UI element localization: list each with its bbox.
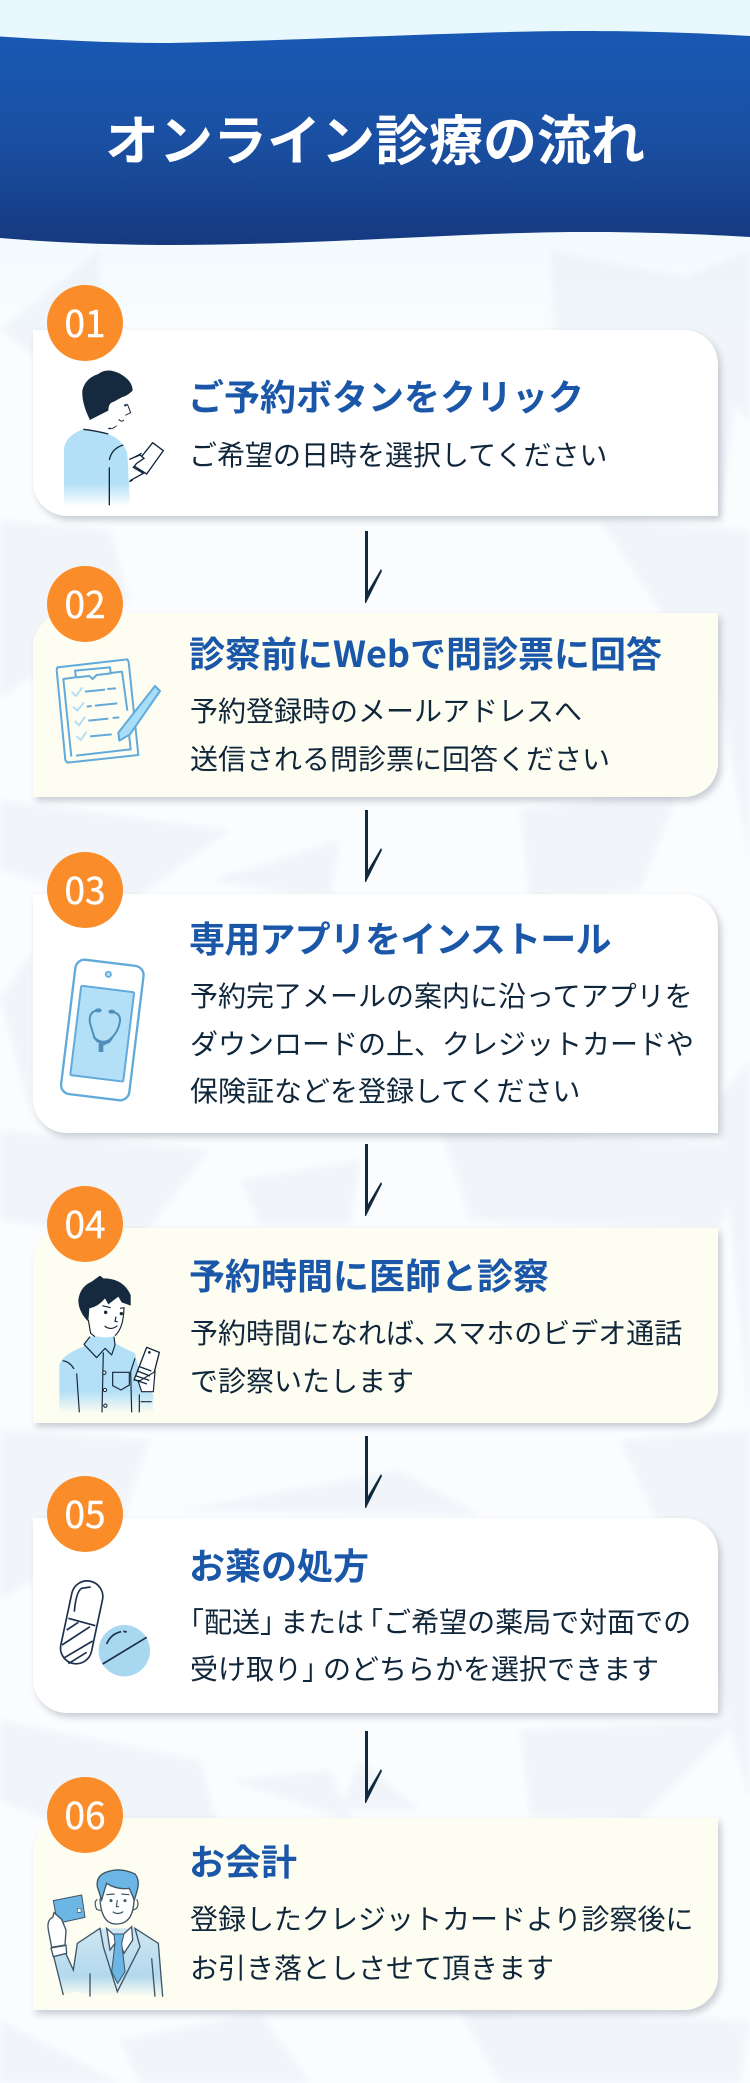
heading: ご予約ボタンをクリック bbox=[188, 369, 584, 421]
body text bbox=[190, 975, 694, 1110]
panel: step 01 bbox=[33, 285, 724, 523]
icon: smartphone with stethoscope bbox=[60, 958, 145, 1102]
body text: ご希望の日時を選択してください bbox=[189, 434, 607, 474]
panel: step 06 bbox=[33, 1777, 724, 2017]
step number 02 bbox=[47, 566, 123, 642]
arrow 2 bbox=[365, 810, 382, 882]
panel: step 03 bbox=[33, 852, 724, 1140]
heading: 専用アプリをインストール bbox=[189, 911, 611, 963]
body text bbox=[190, 690, 610, 778]
step number 03 bbox=[47, 852, 123, 928]
body text: 保険証などを登録してください bbox=[190, 1070, 580, 1110]
step number 03: 03 bbox=[64, 861, 106, 915]
body text: 予約登録時のメールアドレスへ bbox=[190, 690, 582, 730]
body text: 「配送」または「ご希望の薬局で対面での bbox=[176, 1601, 691, 1641]
step number 04: 04 bbox=[64, 1195, 106, 1249]
body text: 送信される問診票に回答ください bbox=[190, 738, 610, 778]
icon: man looking at smartphone from behind bbox=[64, 370, 164, 506]
panel: step 04 bbox=[33, 1186, 724, 1430]
body text: 登録したクレジットカードより診察後に bbox=[190, 1898, 693, 1938]
arrow 3 bbox=[365, 1144, 382, 1216]
icon: man in suit holding credit card bbox=[47, 1869, 164, 1997]
step number 01: 01 bbox=[64, 294, 106, 348]
step number 02: 02 bbox=[64, 575, 106, 629]
heading: 予約時間に医師と診察 bbox=[189, 1248, 549, 1300]
step number 01 bbox=[47, 285, 123, 361]
body text bbox=[190, 1312, 682, 1400]
panel: step 05 bbox=[33, 1476, 724, 1720]
arrow 5 bbox=[365, 1731, 382, 1803]
header banner bbox=[0, 31, 750, 245]
body text: 受け取り」のどちらかを選択できます bbox=[190, 1648, 659, 1688]
arrow 4 bbox=[365, 1436, 382, 1508]
step number 06 bbox=[47, 1777, 123, 1853]
arrow 1 bbox=[365, 531, 382, 603]
step number 04 bbox=[47, 1186, 123, 1262]
body text: 予約完了メールの案内に沿ってアプリを bbox=[190, 975, 693, 1015]
body text: 予約時間になれば、スマホのビデオ通話 bbox=[190, 1312, 682, 1352]
icon: clipboard and pencil bbox=[56, 658, 161, 764]
title: オンライン診療の流れ bbox=[105, 97, 645, 176]
step number 05: 05 bbox=[64, 1485, 106, 1539]
heading: 診察前にWebで問診票に回答 bbox=[189, 626, 662, 678]
step number 06: 06 bbox=[64, 1786, 106, 1840]
body text: お引き落としさせて頂きます bbox=[190, 1946, 554, 1986]
body text bbox=[190, 1898, 693, 1986]
icon: smiling man holding smartphone bbox=[59, 1276, 160, 1412]
heading: お会計 bbox=[189, 1834, 297, 1886]
body text: で診察いたします bbox=[190, 1360, 414, 1400]
panel: step 02 bbox=[33, 566, 724, 804]
icon: capsule and tablet bbox=[60, 1580, 150, 1676]
step number 05 bbox=[47, 1476, 123, 1552]
heading: お薬の処方 bbox=[189, 1538, 369, 1590]
body text: ダウンロードの上、クレジットカードや bbox=[190, 1023, 694, 1063]
body text bbox=[176, 1601, 691, 1688]
